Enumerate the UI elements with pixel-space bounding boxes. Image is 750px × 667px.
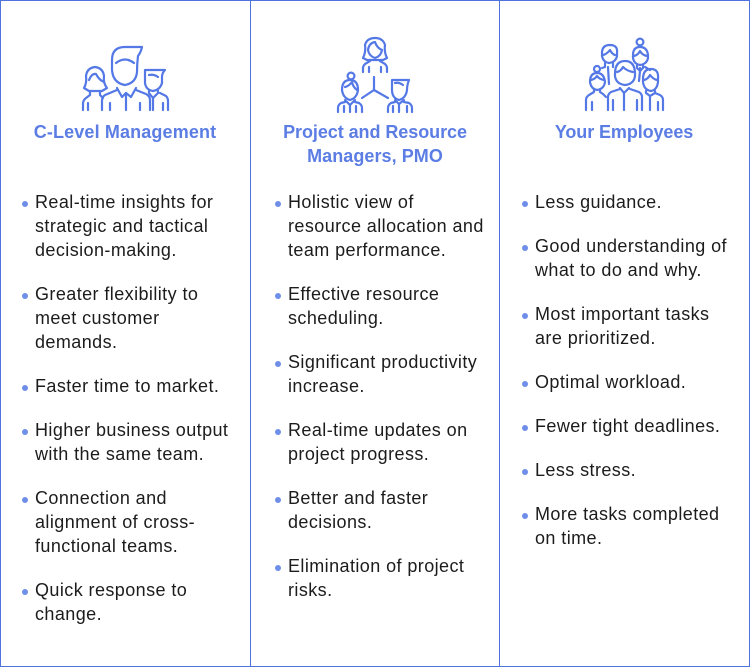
bullet marker bbox=[275, 497, 281, 503]
bullet: holistic view: Holistic view of bbox=[288, 192, 414, 212]
bullet marker bbox=[275, 201, 281, 207]
bullet marker bbox=[22, 589, 28, 595]
bullet: workload: Optimal workload. bbox=[535, 372, 686, 392]
bullet: understanding: Good understanding of bbox=[535, 236, 727, 256]
bullet: time to market: Faster time to market. bbox=[35, 376, 219, 396]
bullet: productivity bbox=[288, 352, 477, 396]
bullet marker bbox=[275, 429, 281, 435]
panel: C-Level Management bbox=[0, 0, 251, 667]
bullet: business output bbox=[35, 420, 228, 464]
bullet: on time bbox=[535, 504, 719, 548]
bullet: alignment: alignment of cross- bbox=[35, 512, 195, 532]
bullet: flexibility: demands. bbox=[35, 332, 117, 352]
bullet marker bbox=[275, 361, 281, 367]
bullet: stress: Less stress. bbox=[535, 460, 636, 480]
bullet marker bbox=[522, 313, 528, 319]
bullet: holistic view: team performance. bbox=[288, 240, 446, 260]
bullet: flexibility bbox=[35, 284, 198, 352]
heading: Project and Resource Managers, PMO: Project and Resource bbox=[283, 122, 467, 142]
bullet: scheduling bbox=[288, 284, 439, 328]
bullet: risks bbox=[288, 556, 464, 600]
bullet marker bbox=[22, 385, 28, 391]
bullet: risks: Elimination of project bbox=[288, 556, 464, 576]
bullet marker bbox=[522, 513, 528, 519]
bullet: quick response: change. bbox=[35, 604, 102, 624]
bullet: prioritized: Most important tasks bbox=[535, 304, 709, 324]
bullet marker bbox=[22, 293, 28, 299]
bullet marker bbox=[22, 201, 28, 207]
icon: employee group bbox=[584, 38, 664, 112]
bullet marker bbox=[522, 245, 528, 251]
bullet: productivity: Significant productivity bbox=[288, 352, 477, 372]
bullet marker bbox=[522, 201, 528, 207]
bullet: business output: with the same team. bbox=[35, 444, 204, 464]
bullet: updates: project progress. bbox=[288, 444, 429, 464]
bullet: prioritized bbox=[535, 304, 709, 348]
bullet: real-time insights: Real-time insights for bbox=[35, 192, 213, 212]
icon: three executives bbox=[82, 46, 170, 112]
bullet marker bbox=[522, 381, 528, 387]
bullet: prioritized: are prioritized. bbox=[535, 328, 656, 348]
bullet: holistic view bbox=[288, 192, 484, 260]
heading: Project and Resource Managers, PMO bbox=[283, 122, 467, 166]
heading: Project and Resource Managers, PMO: Managers, PMO bbox=[307, 146, 443, 166]
bullet marker bbox=[522, 469, 528, 475]
bullet: updates: Real-time updates on bbox=[288, 420, 468, 440]
bullet: flexibility: meet customer bbox=[35, 308, 160, 328]
bullet: on time: on time. bbox=[535, 528, 602, 548]
bullet: flexibility: Greater flexibility to bbox=[35, 284, 198, 304]
bullet: updates bbox=[288, 420, 468, 464]
bullet: real-time insights: decision-making. bbox=[35, 240, 177, 260]
bullet: on time: More tasks completed bbox=[535, 504, 719, 524]
bullet marker bbox=[275, 293, 281, 299]
bullet: quick response bbox=[35, 580, 187, 624]
bullet: understanding bbox=[535, 236, 727, 280]
panel: Project and Resource Managers bbox=[250, 0, 500, 667]
panel: Your Employees bbox=[499, 0, 750, 667]
bullet: scheduling: Effective resource bbox=[288, 284, 439, 304]
bullet: scheduling: scheduling. bbox=[288, 308, 384, 328]
bullet: decisions: decisions. bbox=[288, 512, 372, 532]
bullet marker bbox=[522, 425, 528, 431]
bullet marker bbox=[275, 565, 281, 571]
heading: Your Employees: Your Employees bbox=[555, 122, 693, 142]
bullet: real-time insights: strategic and tactical bbox=[35, 216, 208, 236]
bullet: business output: Higher business output bbox=[35, 420, 228, 440]
bullet: less guidance: Less guidance. bbox=[535, 192, 662, 212]
bullet: productivity: increase. bbox=[288, 376, 365, 396]
bullet: decisions: Better and faster bbox=[288, 488, 428, 508]
bullet: quick response: Quick response to bbox=[35, 580, 187, 600]
bullet: alignment: Connection and bbox=[35, 488, 167, 508]
bullet marker bbox=[22, 497, 28, 503]
bullet: alignment bbox=[35, 488, 195, 556]
bullet: real-time insights bbox=[35, 192, 213, 260]
bullet: holistic view: resource allocation and bbox=[288, 216, 484, 236]
icon: three connected managers bbox=[336, 36, 414, 114]
bullet: decisions bbox=[288, 488, 428, 532]
bullet: risks: risks. bbox=[288, 580, 333, 600]
bullet marker bbox=[22, 429, 28, 435]
bullet: alignment: functional teams. bbox=[35, 536, 178, 556]
heading: C-Level Management: C-Level Management bbox=[34, 122, 216, 142]
bullet: understanding: what to do and why. bbox=[535, 260, 702, 280]
bullet: deadlines: Fewer tight deadlines. bbox=[535, 416, 720, 436]
